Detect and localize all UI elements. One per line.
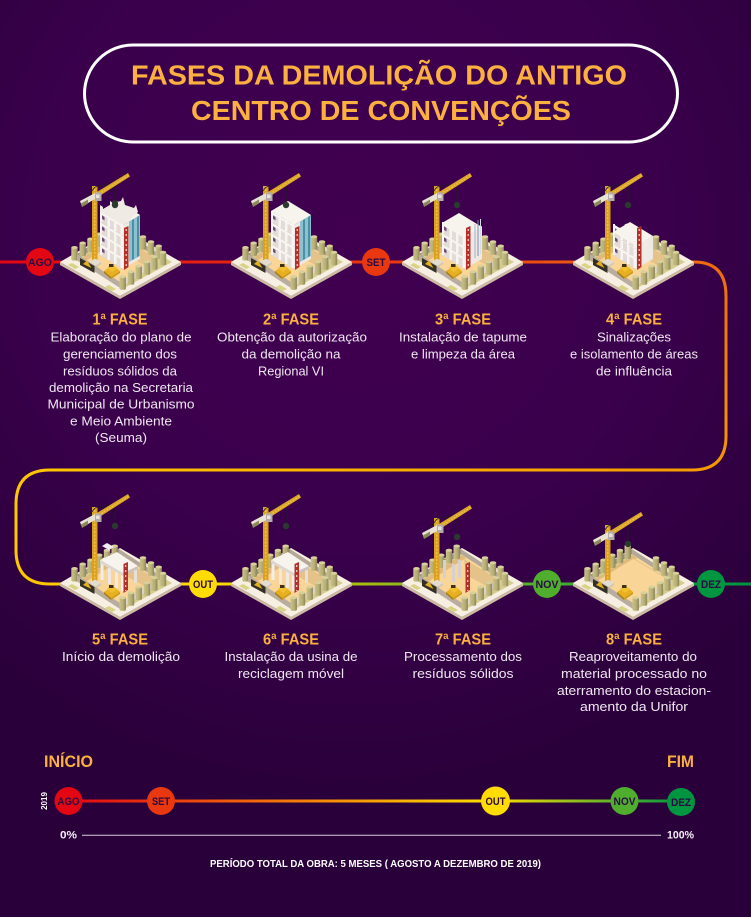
text: phase 2	[217, 312, 367, 378]
text: phase 6: Instalação da usina de	[224, 649, 358, 664]
title: FASES DA DEMOLIÇÃO DO ANTIGO	[131, 60, 627, 90]
timeline path	[0, 262, 751, 584]
text: phase 4	[570, 312, 698, 378]
text: phase 1: resíduos sólidos da	[63, 364, 178, 378]
title box	[84, 45, 678, 142]
illustration: phase 3 site	[402, 173, 523, 299]
marker: SET: SET	[152, 796, 170, 808]
marker: DEZ: DEZ	[671, 797, 691, 809]
illustration: phase 1 site	[60, 173, 181, 299]
label: 100%: 100%	[667, 830, 694, 842]
text: phase 6	[224, 632, 358, 681]
text: phase 8: aterramento do estacion-	[557, 683, 711, 698]
text: phase 8	[557, 632, 711, 714]
label: year: 2019	[40, 792, 49, 810]
illustration: phase 2 site	[231, 173, 352, 299]
text: phase 4: de influência	[596, 364, 673, 378]
illustration: phase 4 site	[573, 173, 694, 299]
text: phase 2: Obtenção da autorização	[217, 330, 367, 344]
summary timeline	[40, 752, 695, 870]
text: phase 7	[404, 632, 522, 681]
text: phase 3: e limpeza da área	[411, 346, 516, 362]
text: phase 1: Municipal de Urbanismo	[48, 396, 194, 412]
text: phase 7: resíduos sólidos	[412, 666, 514, 681]
marker: AGO	[26, 248, 54, 276]
text: phase 1: demolição na Secretaria	[49, 380, 194, 395]
marker: SET	[362, 248, 390, 276]
text: phase 2: Regional VI	[258, 364, 324, 378]
text: phase 1: gerenciamento dos	[63, 346, 178, 362]
text: phase 7: Processamento dos	[404, 649, 522, 664]
marker: OUT: OUT	[486, 796, 506, 808]
text: phase 5	[62, 632, 180, 664]
marker: DEZ	[697, 570, 725, 598]
marker: OUT	[189, 570, 217, 598]
caption: PERÍODO TOTAL DA OBRA: 5 MESES ( AGOSTO A DEZEMBRO DE 2019)	[210, 857, 541, 870]
marker: AGO: AGO	[28, 257, 52, 269]
marker: NOV	[533, 570, 561, 598]
illustration: phase 6 site	[231, 494, 352, 620]
text: phase 7: 7ª FASE	[435, 632, 491, 648]
text: phase 2: da demolição na	[242, 346, 341, 362]
marker: SET: SET	[366, 257, 386, 269]
label: início: INÍCIO	[44, 752, 93, 771]
text: phase 1	[48, 312, 194, 445]
text: phase 3	[399, 312, 527, 362]
text: phase 5: Início da demolição	[62, 649, 180, 664]
marker: DEZ: DEZ	[701, 579, 721, 591]
text: phase 1: Elaboração do plano de	[50, 330, 191, 344]
label: 0%: 0%	[60, 830, 77, 842]
text: phase 1: 1ª FASE	[92, 312, 148, 328]
text: phase 3: 3ª FASE	[435, 312, 491, 328]
text: phase 4: Sinalizações	[597, 330, 671, 344]
text: phase 3: Instalação de tapume	[399, 330, 527, 344]
marker: AGO: AGO	[58, 796, 80, 808]
marker: OUT	[481, 786, 510, 816]
marker: NOV: NOV	[536, 579, 559, 591]
text: phase 6: reciclagem móvel	[238, 666, 344, 681]
text: phase 5: 5ª FASE	[92, 632, 148, 648]
marker: NOV	[610, 787, 638, 815]
illustration: phase 5 site	[60, 494, 181, 620]
text: phase 4: 4ª FASE	[606, 312, 662, 328]
illustration: phase 7 site	[402, 505, 523, 620]
text: phase 8: Reaproveitamento do	[569, 649, 697, 664]
text: phase 8: amento da Unifor	[580, 699, 689, 714]
marker: NOV: NOV	[614, 796, 636, 808]
label: fim: FIM	[667, 752, 694, 771]
marker: AGO	[54, 787, 82, 815]
marker: OUT: OUT	[193, 579, 213, 591]
marker: DEZ	[667, 788, 695, 816]
text: phase 6: 6ª FASE	[263, 632, 319, 648]
text: phase 8: 8ª FASE	[606, 632, 662, 648]
marker: SET	[147, 787, 175, 815]
illustration: phase 8 site	[573, 512, 694, 620]
title: CENTRO DE CONVENÇÕES	[191, 95, 571, 126]
text: phase 4: e isolamento de áreas	[570, 346, 698, 362]
summary line	[68, 800, 680, 802]
text: phase 2: 2ª FASE	[263, 312, 319, 328]
text: phase 1: e Meio Ambiente	[70, 414, 172, 428]
text: phase 8: material processado no	[561, 666, 707, 681]
text: phase 1: (Seuma)	[95, 430, 147, 445]
